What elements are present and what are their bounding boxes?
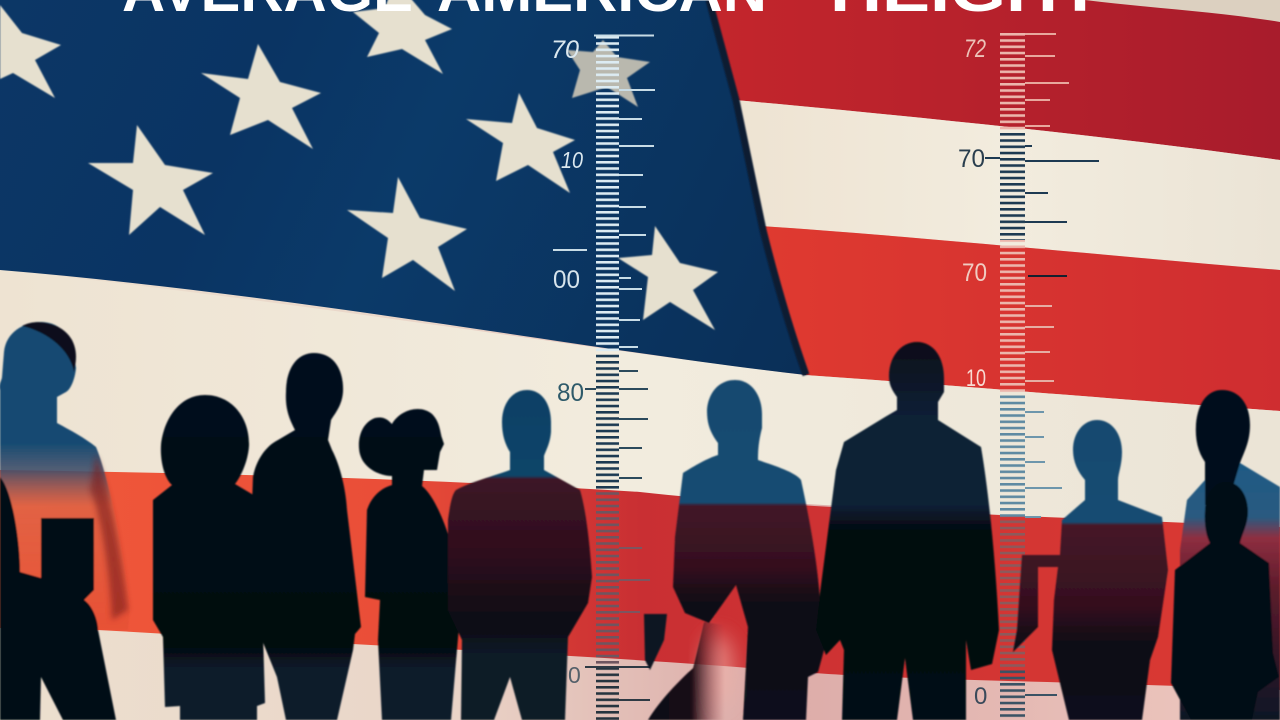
right ruler numbers [958, 35, 987, 710]
left ruler tick bars [596, 36, 619, 720]
flag stripe: long red [0, 470, 1280, 690]
flag stripe: long white [0, 270, 1280, 530]
left ruler numbers: 10 [563, 514, 584, 540]
left height ruler [551, 36, 655, 720]
person 1 arm shading [90, 455, 128, 620]
right ruler numbers: 70 [958, 145, 985, 173]
person 2: woman with curly hair [153, 395, 265, 720]
person 1: far left, blue-tinted man fading into the stripe [0, 322, 130, 720]
star 8 [618, 226, 718, 330]
flag stripe: upper red [700, 0, 1280, 160]
person 4: woman with hair bun [359, 409, 461, 720]
right ruler tick bars [1000, 33, 1025, 720]
right ruler numbers: 72 [964, 35, 986, 63]
star 6 [347, 177, 467, 291]
flag stripe: middle red [760, 226, 1280, 411]
left ruler numbers: 00 [553, 266, 580, 294]
flag canton shadow edge [709, 0, 806, 375]
person 1 foreground figure [0, 477, 116, 720]
star 3 [353, 0, 452, 74]
left ruler long ticks [553, 36, 655, 700]
stars on canton [0, 0, 718, 330]
right ruler numbers: 70 [962, 259, 987, 287]
star 2 [201, 44, 321, 149]
flag stripe: upper white [735, 100, 1280, 270]
left ruler numbers: 0 [568, 662, 581, 688]
silhouette group: crowd of people [0, 322, 1280, 720]
flag canton: blue field [0, 0, 806, 375]
person 7: tall man in dark jacket [816, 342, 999, 720]
left ruler numbers [551, 36, 584, 688]
star 4 [466, 93, 575, 193]
right ruler numbers: 10 [966, 365, 986, 392]
left ruler numbers: 80 [557, 379, 584, 407]
glow: pink area beside child [702, 634, 734, 706]
person 3: tall man [250, 353, 361, 720]
person 9: far right figure with dark hair [1171, 390, 1280, 720]
person 9 foreground woman [1171, 482, 1279, 720]
star 1 [0, 5, 61, 98]
person 9 head [1196, 390, 1250, 505]
person 8: woman with blue head and maroon top [1013, 420, 1168, 720]
right height ruler [958, 33, 1099, 720]
flag stripe: top right white corner [1080, 0, 1280, 22]
dropped bag [644, 614, 667, 670]
person 5: man with blue head and maroon shirt [448, 390, 592, 720]
left ruler numbers: 10 [561, 147, 583, 173]
star 7 [567, 40, 650, 107]
left ruler numbers: 70 [551, 36, 579, 64]
title [122, 0, 1102, 24]
right ruler numbers: 0 [974, 683, 987, 710]
person 1 hair [22, 322, 76, 372]
right ruler long ticks [985, 34, 1099, 695]
person 6: man with blue head and maroon shirt [673, 380, 824, 720]
star 5 [88, 125, 213, 235]
person 9 shirt [1180, 463, 1280, 720]
child silhouette with person 6 [644, 614, 735, 720]
